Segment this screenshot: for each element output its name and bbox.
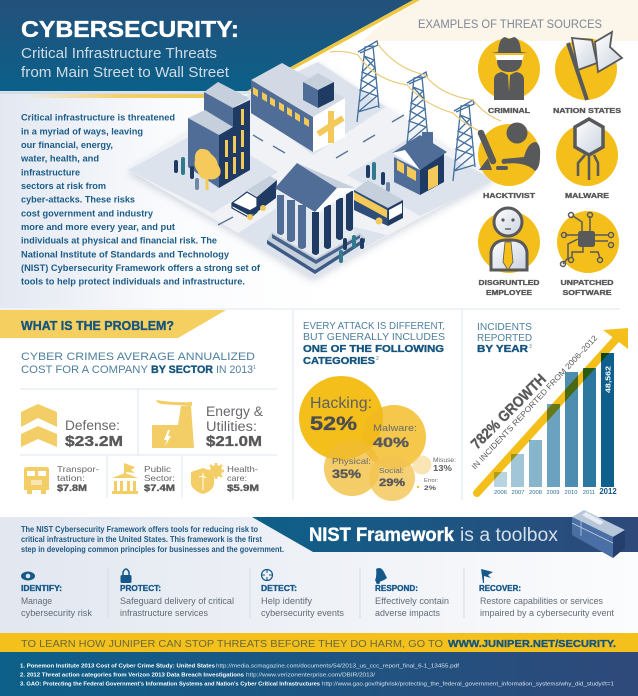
bubble chart: attack categories: Social: — [379, 466, 404, 475]
bar chart: incidents by year: 2008 — [529, 490, 542, 496]
label: unpatched software: SOFTWARE — [562, 288, 612, 297]
sector: public sector — [112, 463, 175, 494]
bar chart: incidents by year: 2010 — [565, 490, 577, 496]
heading: threat sources: EXAMPLES OF THREAT SOURCES — [418, 19, 602, 31]
sector: defense: $23.2M — [65, 434, 123, 450]
truck — [232, 176, 277, 220]
column: respond: Effectively contain — [375, 596, 449, 606]
column: identify: cybersecurity risk — [21, 608, 93, 618]
title: CYBERSECURITY: — [21, 16, 239, 42]
NIST intro text: critical infrastructure in the United States. This framework is the first — [21, 534, 262, 544]
bubble chart: attack categories: Misuse: — [433, 457, 456, 464]
footer references — [0, 652, 638, 696]
people — [174, 157, 390, 192]
banner: what is the problem: WHAT IS THE PROBLEM? — [21, 318, 174, 333]
growth arrow — [477, 328, 628, 493]
sector: transportation: Transpor- — [57, 464, 99, 474]
heading: attack categories: EVERY ATTACK IS DIFFERENT, — [303, 321, 445, 332]
threat sources band — [362, 0, 638, 41]
callout: growth: IN INCIDENTS REPORTED FROM 2006–2012 — [470, 333, 600, 471]
column: recover: RECOVER: — [479, 583, 521, 593]
heading: incidents by year: REPORTED — [477, 333, 532, 344]
banner: what is the problem — [0, 310, 226, 338]
sector: defense — [21, 404, 123, 450]
heading: incidents by year: BY YEAR — [477, 343, 528, 355]
column: recover: impaired by a cybersecurity event — [480, 608, 614, 618]
icon: unpatched software — [557, 211, 619, 273]
heading: attack categories: ONE OF THE FOLLOWING — [303, 344, 444, 355]
NIST banner — [252, 517, 638, 552]
power lines — [330, 41, 501, 181]
bar chart: incidents by year: 2007 — [512, 490, 524, 496]
sector: healthcare: care: — [227, 473, 247, 483]
sector: defense: Defense: — [65, 418, 120, 433]
heading: cost by sector: COST FOR A COMPANY — [21, 364, 149, 376]
label: disgruntled employee — [478, 278, 540, 297]
callout: growth: 782% GROWTH — [468, 371, 550, 453]
column: detect: Help identify — [261, 596, 313, 606]
isometric city map — [128, 41, 501, 278]
sector: healthcare: $5.9M — [227, 483, 259, 493]
icon: disgruntled employee — [478, 208, 540, 273]
column: identify: Manage — [21, 596, 52, 606]
bank — [267, 163, 365, 274]
icon: toolbox — [572, 510, 625, 558]
call to action band — [0, 633, 638, 652]
left intro background — [0, 92, 330, 308]
footer references: 3. GAO: Protecting the Federal Government's Information Systems and Nation's Cyber Critical Infrastructures — [20, 681, 320, 687]
subtitle: from Main Street to Wall Street — [21, 64, 230, 81]
NIST banner: is a toolbox — [460, 525, 558, 546]
column: recover — [479, 569, 614, 618]
intro text block: (NIST) Cybersecurity Framework offers a strong set of — [21, 262, 261, 273]
panel: NIST background — [0, 517, 638, 633]
hospital — [251, 63, 345, 152]
heading: cost by sector: 1 — [253, 365, 256, 371]
icon: hacktivist — [478, 122, 540, 186]
heading: cost by sector: BY SECTOR — [151, 364, 213, 376]
bubble chart: attack categories: 52% — [310, 414, 357, 435]
column: respond: RESPOND: — [375, 583, 418, 593]
column: identify: IDENTIFY: — [21, 583, 62, 593]
sector: public sector: Public — [144, 464, 172, 474]
label: unpatched software — [560, 278, 614, 297]
footer references: 1. Ponemon Institute 2013 Cost of Cyber Crime Study: United States — [20, 664, 215, 670]
intro text block: cost government and industry — [21, 207, 154, 218]
column: recover: Restore capabilities or services — [480, 596, 603, 606]
bubble chart: attack categories: 2% — [424, 485, 436, 492]
NIST intro text — [21, 524, 284, 554]
heading: incidents by year — [477, 322, 532, 355]
intro text block — [20, 112, 261, 287]
heading: attack categories: 2 — [376, 356, 379, 362]
column: protect: infrastructure services — [120, 608, 208, 618]
NIST intro text: The NIST Cybersecurity Framework offers tools for reducing risk to — [21, 524, 258, 534]
intro text block: infrastructure — [21, 166, 80, 177]
bubble chart: attack categories: Error: — [424, 478, 438, 484]
column: respond: adverse impacts — [375, 608, 440, 618]
sector: energy and utilities: Utilities: — [206, 419, 257, 434]
sector: energy and utilities: Energy & — [206, 404, 263, 419]
bubble chart: attack categories: 13% — [433, 463, 452, 473]
icon: malware — [556, 119, 618, 186]
heading: incidents by year: 3 — [529, 344, 532, 350]
bar chart: incidents by year — [477, 328, 628, 496]
call to action band: WWW.JUNIPER.NET/SECURITY. — [448, 638, 616, 650]
column: detect: DETECT: — [261, 583, 297, 593]
bar chart: incidents by year: 2011 — [583, 490, 595, 496]
subtitle — [21, 45, 230, 81]
NIST banner: NIST Framework — [309, 525, 454, 546]
heading: cost by sector: CYBER CRIMES AVERAGE ANNUALIZED — [21, 351, 255, 363]
label: criminal: CRIMINAL — [488, 106, 531, 115]
call to action band: TO LEARN HOW JUNIPER CAN STOP THREATS BEFORE THEY DO HARM, GO TO — [21, 638, 443, 650]
subtitle: Critical Infrastructure Threats — [21, 45, 217, 62]
bubble chart: attack categories: Malware: — [373, 423, 417, 434]
column: protect: Safeguard delivery of critical — [120, 596, 234, 606]
bar chart: incidents by year: 2012 — [599, 487, 617, 496]
house — [392, 132, 447, 195]
sector: public sector: $7.4M — [144, 483, 175, 493]
intro text block: our financial, energy, — [21, 139, 113, 150]
intro text block: in a myriad of ways, leaving — [21, 125, 143, 136]
footer references: http://media.scmagazine.com/documents/54/2013_us_ccc_report_final_6-1_13455.pdf — [216, 664, 460, 670]
office tower — [188, 82, 250, 188]
sector: transportation — [24, 464, 99, 494]
label: malware: MALWARE — [565, 191, 609, 200]
people at bank — [339, 235, 364, 263]
bus — [354, 180, 403, 226]
sector: healthcare — [191, 463, 259, 494]
icon: criminal — [478, 37, 540, 100]
column: detect: cybersecurity events — [261, 608, 344, 618]
label: disgruntled employee: EMPLOYEE — [486, 288, 532, 297]
icon: nation states — [555, 32, 622, 100]
label: unpatched software: UNPATCHED — [560, 278, 614, 287]
footer references: 2. 2012 Threat action categories from Verizon 2013 Data Breach Investigations — [20, 672, 244, 678]
bubble chart: attack categories: Physical: — [332, 456, 371, 466]
intro text block: water, health, and — [20, 153, 99, 164]
sector: transportation: $7.8M — [57, 483, 87, 493]
footer references: http://www.verizonenterprise.com/DBIR/2013/ — [246, 672, 376, 678]
column: identify — [21, 572, 93, 618]
label: nation states: NATION STATES — [553, 106, 621, 115]
heading: attack categories: BUT GENERALLY INCLUDES — [303, 332, 445, 343]
bar chart: incidents by year: 2009 — [547, 490, 559, 496]
NIST intro text: step in developing common principles for businesses and the government. — [21, 544, 284, 554]
sector: healthcare: Health- — [227, 464, 258, 474]
heading: cost by sector — [21, 351, 256, 376]
intro text block: more and more every year, and put — [21, 221, 175, 232]
bubble chart: attack categories: 35% — [332, 467, 361, 481]
bubble chart: attack categories — [299, 376, 456, 501]
column: protect: PROTECT: — [120, 583, 161, 593]
heading: attack categories: CATEGORIES — [303, 356, 375, 367]
column: respond — [375, 568, 449, 618]
tree — [194, 149, 221, 190]
bubble chart: attack categories: 40% — [373, 434, 410, 450]
sector: energy and utilities — [152, 400, 263, 450]
heading: cost by sector: IN 2013 — [216, 364, 253, 376]
intro text block: tools to help protect individuals and infrastructure. — [21, 276, 245, 287]
intro text block: individuals at physical and financial risk. The — [21, 235, 217, 246]
intro text block: sectors at risk from — [21, 180, 106, 191]
heading: attack categories — [303, 321, 445, 367]
sector: energy and utilities: $21.0M — [206, 434, 262, 450]
header banner — [0, 0, 420, 98]
label: disgruntled employee: DISGRUNTLED — [478, 278, 540, 287]
label: hacktivist: HACKTIVIST — [483, 191, 536, 200]
intro text block: Critical infrastructure is threatened — [21, 112, 175, 123]
sector: public sector: Sector: — [144, 473, 175, 483]
heading: incidents by year: INCIDENTS — [477, 322, 532, 333]
column: protect — [120, 569, 234, 618]
sector: transportation: tation: — [57, 473, 85, 483]
column: detect — [261, 569, 344, 618]
intro text block: National Institute of Standards and Technology — [21, 248, 230, 259]
bubble chart: attack categories: 29% — [379, 477, 405, 489]
bar chart: incidents by year: 48,562 — [604, 366, 612, 393]
bar chart: incidents by year: 2006 — [494, 490, 507, 496]
footer references: http://www.gao.gov/highrisk/protecting_the_federal_government_information_systems/why_did_study#t=1 — [322, 681, 614, 687]
bubble chart: attack categories: Hacking: — [310, 395, 372, 412]
intro text block: cyber-attacks. These risks — [21, 194, 135, 205]
